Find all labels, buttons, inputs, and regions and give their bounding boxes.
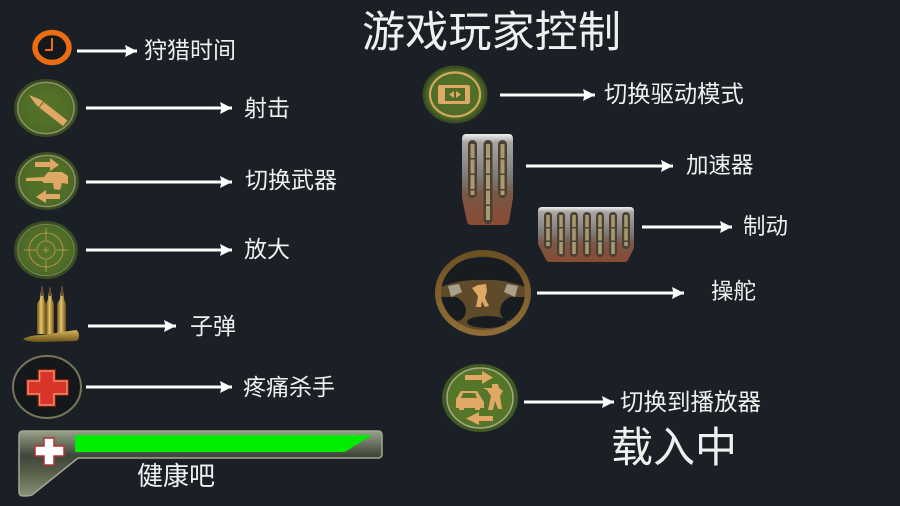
label: ammo: 子弹 <box>190 313 236 339</box>
icon: switch drive mode <box>424 66 486 122</box>
label: zoom: 放大 <box>244 236 290 262</box>
label: health bar: 健康吧 <box>137 461 215 491</box>
icon: steering wheel <box>438 253 528 333</box>
label: switch drive mode: 切换驱动模式 <box>604 81 744 107</box>
loading text: 载入中 <box>611 424 737 471</box>
label: painkiller: 疼痛杀手 <box>243 374 335 400</box>
label: shoot: 射击 <box>244 95 290 121</box>
icon: ammo <box>23 286 79 342</box>
arrow: accelerator <box>526 164 673 168</box>
arrow: hunting time <box>77 50 137 52</box>
icon: painkiller <box>13 356 81 418</box>
icon: clock <box>35 32 69 62</box>
arrow: steer <box>537 292 684 294</box>
health bar fill <box>75 435 372 452</box>
arrow: painkiller <box>86 386 232 388</box>
label: switch weapon: 切换武器 <box>245 167 337 193</box>
arrow: switch weapon <box>86 180 232 184</box>
label: hunting time: 狩猎时间 <box>144 37 236 63</box>
label: steer: 操舵 <box>711 279 756 304</box>
icon: health cross <box>35 438 64 465</box>
health bar <box>19 431 382 496</box>
arrow: shoot <box>86 106 232 110</box>
label: accelerator: 加速器 <box>686 153 754 178</box>
arrow: brake <box>642 226 732 228</box>
icon: shoot bullet <box>15 80 77 136</box>
label: switch to player: 切换到播放器 <box>620 389 761 415</box>
icon: switch weapon <box>16 153 78 209</box>
icon: accelerator pedal <box>462 134 513 225</box>
arrow: zoom <box>86 248 232 252</box>
icon: switch to player <box>442 364 518 432</box>
title: 游戏玩家控制 <box>362 9 621 57</box>
arrow: switch drive mode <box>500 94 595 96</box>
arrow: switch to player <box>524 400 614 404</box>
arrow: ammo <box>88 324 176 328</box>
icon: brake pedal <box>538 207 634 262</box>
label: brake: 制动 <box>743 214 788 239</box>
icon: zoom crosshair <box>15 222 77 278</box>
